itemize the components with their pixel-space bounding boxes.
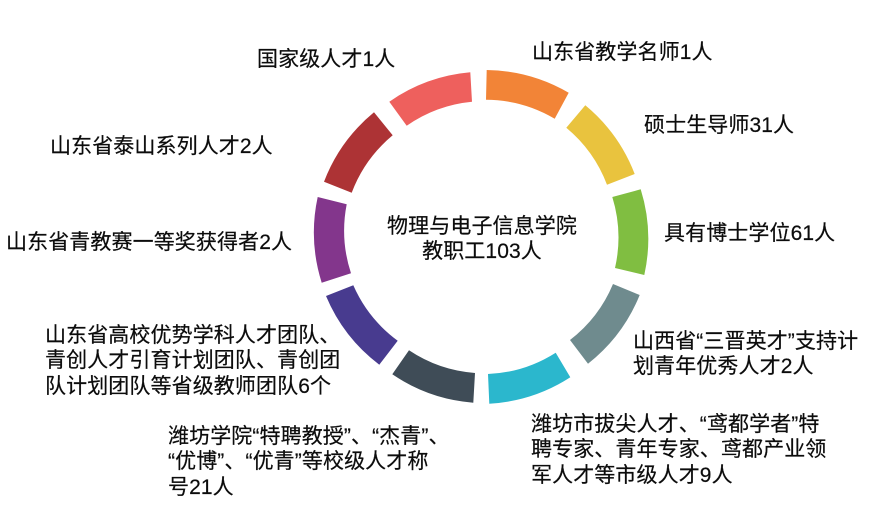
label: 校级人才称号: “优博”、“优青”等校级人才称 — [168, 450, 428, 473]
center title — [387, 214, 577, 263]
label: 三晋英才 — [633, 330, 858, 378]
label: 山东省青教赛一等奖获得者: 山东省青教赛一等奖获得者2人 — [6, 231, 292, 254]
segment: indigo — [326, 285, 398, 365]
label: 省级教师团队: 青创人才引育计划团队、青创团 — [45, 349, 340, 372]
segment: green — [612, 189, 648, 275]
label: 省级教师团队: 队计划团队等省级教师团队6个 — [45, 375, 331, 398]
segment: dark slate — [392, 350, 475, 403]
label: 校级人才称号 — [168, 424, 450, 499]
segment: purple — [314, 197, 351, 283]
label: 具有博士学位: 具有博士学位61人 — [664, 222, 835, 245]
label: 三晋英才: 山西省“三晋英才”支持计 — [633, 330, 858, 353]
label: 三晋英才: 划青年优秀人才2人 — [633, 355, 814, 378]
segment: cyan — [488, 353, 570, 404]
label: 校级人才称号: 号21人 — [168, 476, 234, 499]
label: 市级人才 — [531, 412, 826, 487]
label: 市级人才: 军人才等市级人才9人 — [531, 464, 733, 487]
segment: orange — [486, 70, 569, 119]
label: 山东省教学名师: 山东省教学名师1人 — [532, 41, 713, 64]
label: 省级教师团队 — [45, 324, 340, 398]
label: 省级教师团队: 山东省高校优势学科人才团队、 — [45, 324, 340, 347]
segment: yellow — [566, 105, 635, 185]
center title: 教职工103人 — [422, 240, 542, 263]
segment: coral — [389, 72, 472, 126]
label: 市级人才: 聘专家、青年专家、鸢都产业领 — [531, 438, 826, 461]
label: 硕士生导师: 硕士生导师31人 — [644, 114, 794, 137]
center title: 物理与电子信息学院 — [387, 215, 577, 238]
segment: crimson — [324, 112, 393, 193]
label: 市级人才: 潍坊市拔尖人才、“鸢都学者”特 — [531, 413, 820, 436]
segment: grey — [570, 284, 640, 364]
label: 校级人才称号: 潍坊学院“特聘教授”、“杰青”、 — [168, 425, 450, 448]
label: 国家级人才: 国家级人才1人 — [257, 48, 395, 71]
label: 山东省泰山系列人才: 山东省泰山系列人才2人 — [50, 135, 273, 158]
